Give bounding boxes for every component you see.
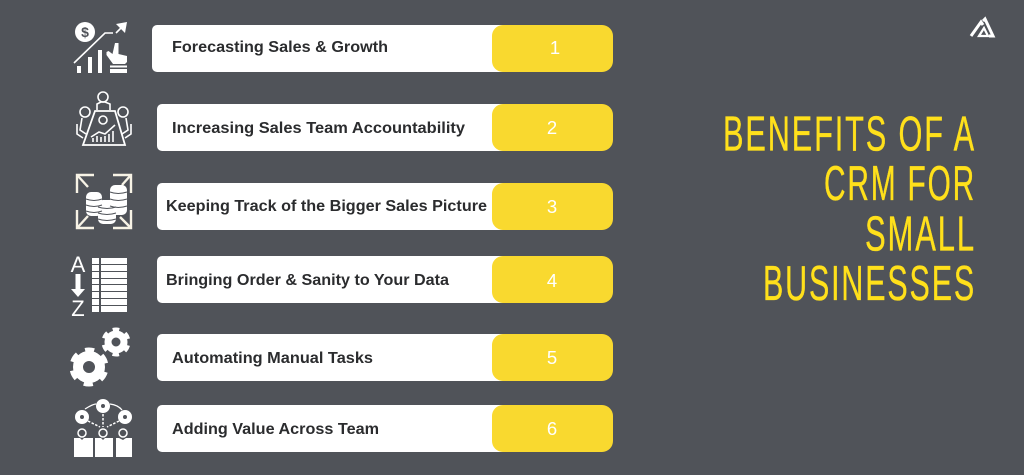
row 1: Forecasting Sales & Growth	[152, 25, 613, 72]
row 1: Forecasting Sales & Growth: 1	[550, 37, 560, 58]
row 5: Automating Manual Tasks: Automating Manual Tasks	[172, 350, 373, 367]
row 4: Bringing Order & Sanity to Your Data: 4	[547, 270, 557, 291]
row 4: Bringing Order & Sanity to Your Data	[157, 256, 613, 303]
row 6: Adding Value Across Team: Adding Value Across Team	[172, 421, 379, 438]
icon: sales growth chart with coin and hand: $	[81, 24, 89, 40]
icon: team meeting around a table	[77, 92, 131, 145]
icon: A to Z sorted list: A	[71, 252, 86, 277]
row 3: Keeping Track of the Bigger Sales Picture: 3	[547, 196, 557, 217]
icon: A to Z sorted list	[71, 252, 127, 321]
icon: logo mountains	[971, 19, 993, 36]
row 2: Increasing Sales Team Accountability: 2	[547, 117, 557, 138]
row 4: Bringing Order & Sanity to Your Data: Bringing Order & Sanity to Your Data	[166, 272, 449, 289]
row 1: Forecasting Sales & Growth: Forecasting Sales & Growth	[172, 39, 388, 56]
row 6: Adding Value Across Team	[157, 405, 613, 452]
row 5: Automating Manual Tasks: 5	[547, 347, 557, 368]
title	[723, 108, 976, 311]
icon: gears	[69, 327, 131, 387]
icon: sales growth chart with coin and hand	[74, 22, 127, 73]
row 2: Increasing Sales Team Accountability	[157, 104, 613, 151]
row 2: Increasing Sales Team Accountability: Increasing Sales Team Accountability	[172, 120, 465, 137]
row 3: Keeping Track of the Bigger Sales Picture	[157, 183, 613, 230]
icon: coin stacks with expanding arrows	[77, 175, 131, 228]
row 6: Adding Value Across Team: 6	[547, 418, 557, 439]
icon: A to Z sorted list: Z	[71, 296, 85, 321]
row 5: Automating Manual Tasks	[157, 334, 613, 381]
icon: team with shared gears	[74, 402, 132, 457]
row 3: Keeping Track of the Bigger Sales Picture: Keeping Track of the Bigger Sales Picture	[166, 198, 487, 215]
